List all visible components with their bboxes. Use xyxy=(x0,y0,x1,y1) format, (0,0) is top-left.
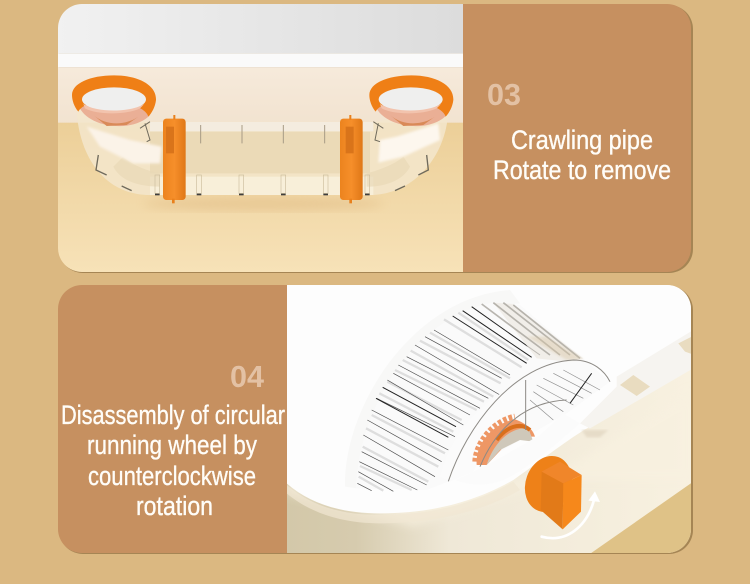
photo: running wheel in cage xyxy=(287,283,693,557)
text: running wheel caption: running wheel by xyxy=(87,430,257,460)
pipe body xyxy=(78,122,447,195)
wheel rims xyxy=(448,360,610,481)
text: running wheel caption xyxy=(61,400,285,521)
right ring xyxy=(377,106,446,126)
tray lip in front of wheel xyxy=(486,439,534,465)
text: running wheel caption: rotation xyxy=(136,491,213,521)
brown text block background xyxy=(463,4,691,272)
far slats xyxy=(530,370,600,420)
white front band xyxy=(498,394,500,396)
orange collars xyxy=(163,119,186,200)
wheel well xyxy=(345,290,520,488)
brown text block background xyxy=(58,285,287,553)
white tray xyxy=(287,283,693,513)
rotation arrow xyxy=(542,500,594,538)
infographic canvas xyxy=(58,4,693,554)
wheel slats xyxy=(359,313,528,491)
orange gear xyxy=(477,419,535,465)
panel: running wheel xyxy=(58,283,693,557)
text: running wheel caption: counterclockwise xyxy=(88,461,256,491)
text: running wheel caption: Disassembly of circular xyxy=(61,400,285,430)
left ring xyxy=(80,105,150,126)
text: crawling pipe caption xyxy=(493,125,671,185)
panel: crawling pipe xyxy=(57,3,693,273)
photo: crawling pipe on cage wall xyxy=(57,3,463,273)
wheel interior xyxy=(356,303,610,490)
orange knob xyxy=(524,456,572,512)
wheel drum xyxy=(493,303,583,362)
text: crawling pipe caption: Crawling pipe xyxy=(511,125,653,155)
text: crawling pipe caption: Rotate to remove xyxy=(493,155,671,185)
number 03: 03 xyxy=(487,77,521,112)
number 04: 04 xyxy=(230,359,265,394)
floor corner xyxy=(588,482,693,555)
